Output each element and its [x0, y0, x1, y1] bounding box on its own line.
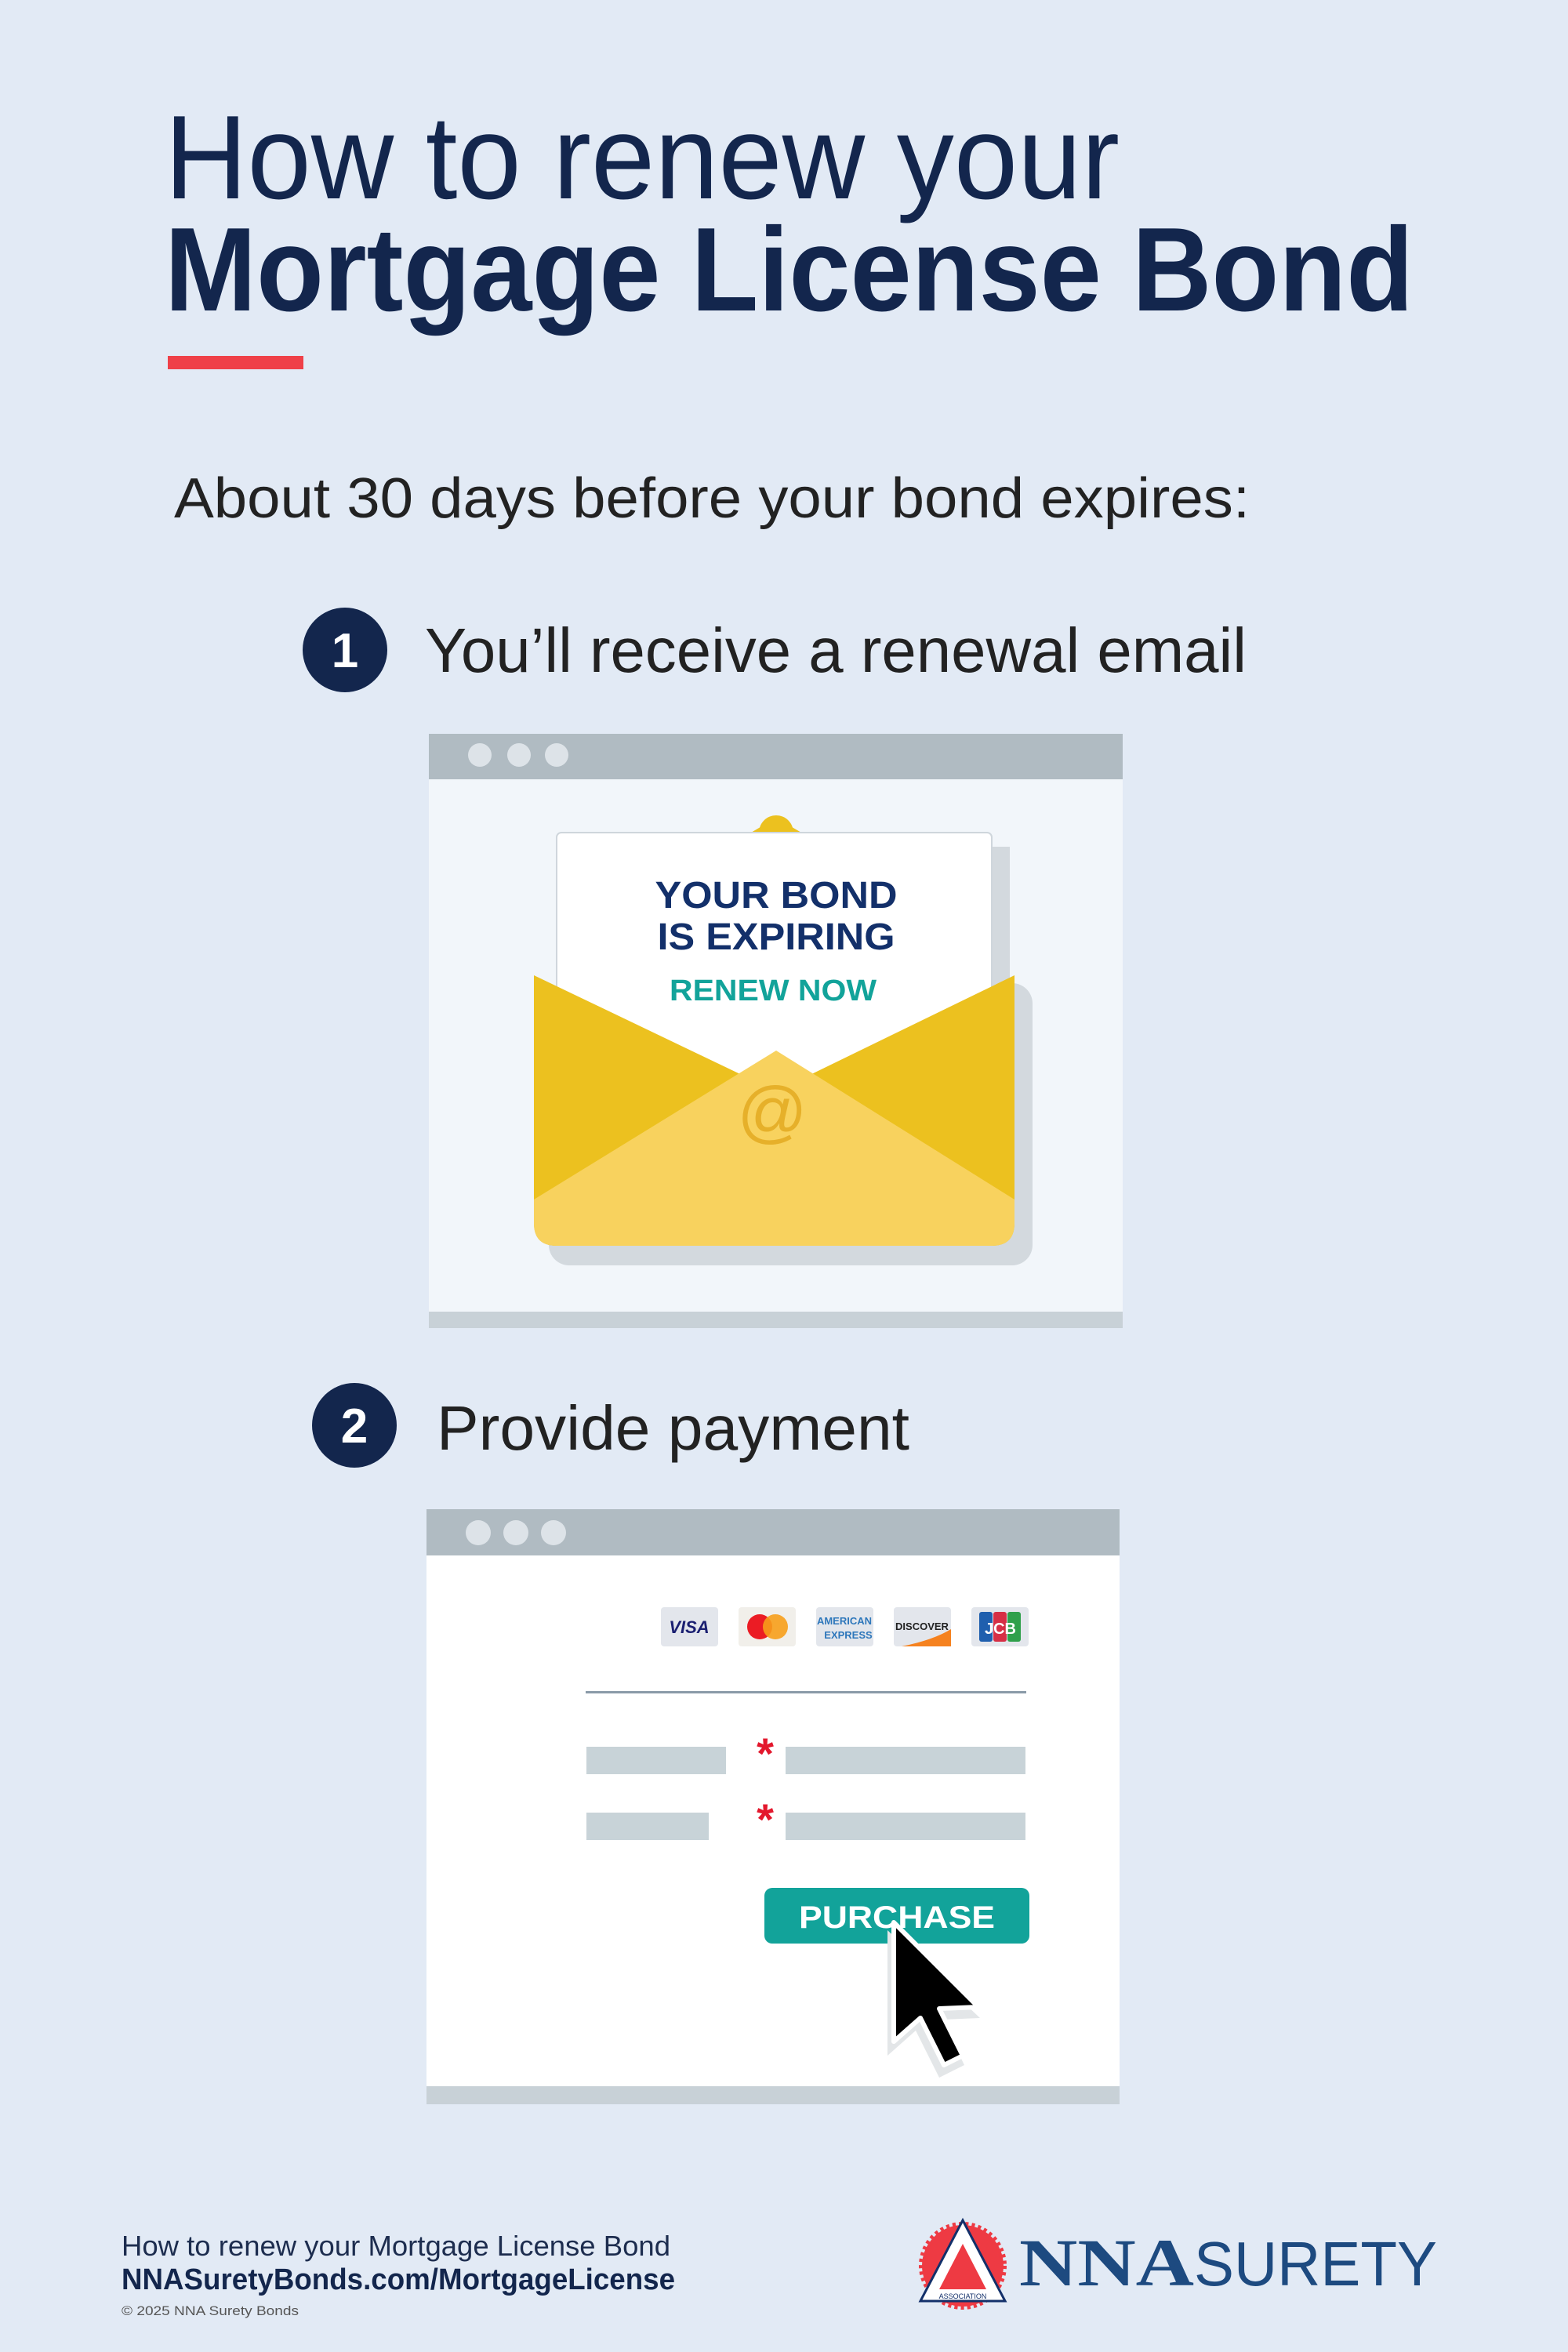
payment card icons: JCB	[985, 1621, 1016, 1638]
footer text: How to renew your Mortgage License Bond	[122, 2230, 670, 2262]
icon: at sign: @	[737, 1073, 808, 1150]
envelope	[534, 815, 1033, 1265]
icon: seal	[920, 2220, 1005, 2307]
step 2 heading: 2	[341, 1399, 368, 1454]
letter: IS EXPIRING	[657, 916, 895, 958]
footer text	[122, 2230, 675, 2318]
icon: seal: ASSOCIATION	[939, 2292, 986, 2300]
form fields: *	[757, 1795, 774, 1844]
form fields: *	[757, 1729, 774, 1778]
payment card icons: VISA	[669, 1617, 710, 1637]
letter: RENEW NOW	[670, 975, 877, 1007]
logo: NNA Surety: NNA	[1019, 2225, 1194, 2300]
step 2 heading: Provide payment	[437, 1393, 909, 1463]
payment card icons	[661, 1607, 1029, 1646]
logo: NNA Surety	[920, 2220, 1437, 2307]
title	[165, 91, 1414, 336]
step 1 heading: 1	[332, 624, 358, 678]
logo: NNA Surety: SURETY	[1194, 2229, 1437, 2299]
title: How to renew your	[165, 91, 1120, 224]
purchase button	[764, 1888, 1029, 1944]
payment card icons: AMERICAN	[817, 1615, 872, 1627]
title: Mortgage License Bond	[165, 203, 1414, 336]
intro text: About 30 days before your bond expires:	[174, 467, 1250, 530]
step 2 heading	[312, 1383, 909, 1468]
payment card icons: DISCOVER	[895, 1621, 949, 1632]
purchase button: PURCHASE	[799, 1900, 995, 1935]
letter	[557, 833, 1010, 1091]
browser: email illustration	[429, 734, 1123, 1328]
step 1 heading: You’ll receive a renewal email	[425, 615, 1247, 685]
letter: YOUR BOND	[655, 875, 897, 916]
icon: cursor	[887, 1922, 980, 2078]
payment card icons: EXPRESS	[824, 1629, 873, 1641]
form fields	[586, 1729, 1025, 1844]
red accent bar	[168, 356, 303, 369]
browser: payment form	[426, 1509, 1120, 2104]
footer text: © 2025 NNA Surety Bonds	[122, 2303, 299, 2318]
footer text: NNASuretyBonds.com/MortgageLicense	[122, 2263, 675, 2296]
